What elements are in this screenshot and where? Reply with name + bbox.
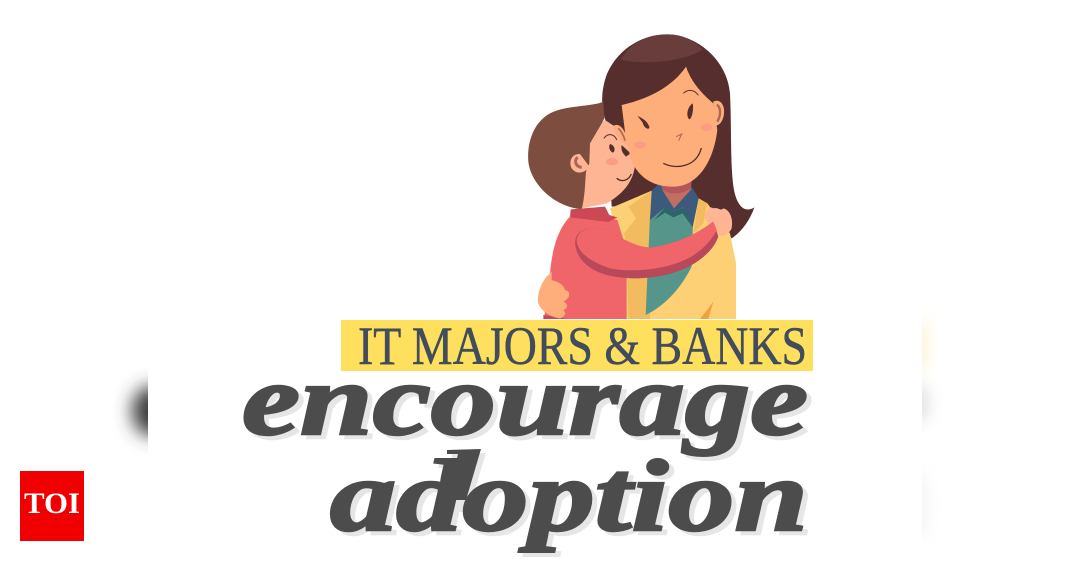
logo: TOI <box>20 471 84 541</box>
woman's neck <box>659 180 692 208</box>
tall ascender shadow <box>448 453 486 512</box>
banner background <box>341 320 813 371</box>
child's head <box>528 102 635 209</box>
blurred backdrop: left edge <box>132 386 172 436</box>
child's arm <box>575 222 718 278</box>
tall ascender <box>447 449 481 500</box>
illustration: mother hugging child <box>528 34 754 319</box>
logo: TOI: TOI <box>24 487 80 520</box>
headline: adoption: adoption <box>330 440 808 553</box>
headline: adoption: adoption <box>335 444 813 557</box>
infographic canvas <box>20 34 934 557</box>
woman's shirt <box>646 183 699 315</box>
headline: encourage: encourage <box>247 348 813 461</box>
child's body <box>543 207 627 319</box>
woman's hair <box>602 34 754 238</box>
child's right hand <box>703 208 732 236</box>
banner: IT majors and banks <box>341 316 813 376</box>
child's left hand <box>538 272 569 318</box>
woman's face <box>613 67 724 187</box>
headline: encourage: encourage <box>242 344 808 457</box>
banner text: IT MAJORS & BANKS <box>358 316 807 376</box>
woman's jacket <box>610 191 736 319</box>
blurred backdrop: right edge <box>922 316 934 512</box>
